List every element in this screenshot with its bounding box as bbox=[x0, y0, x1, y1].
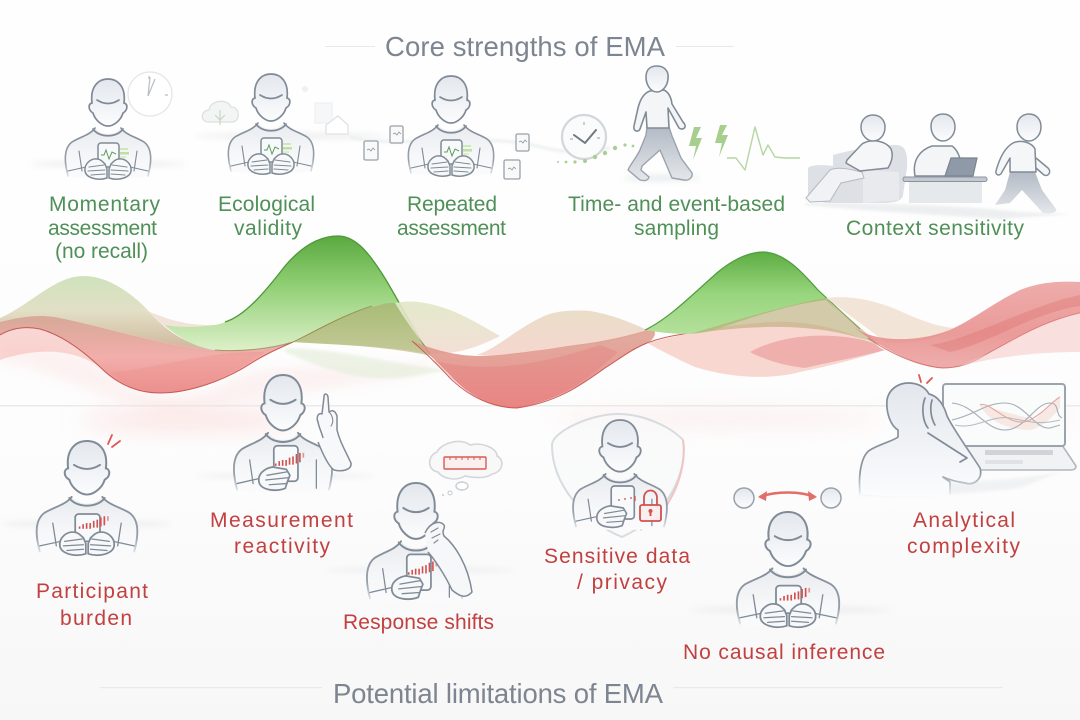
heading: core strengths: Core strengths of EMA bbox=[385, 31, 666, 62]
pale trail on the right bbox=[960, 313, 1080, 366]
heading: potential limitations: Potential limitations of EMA bbox=[333, 678, 664, 709]
olive under the second peak bbox=[690, 298, 880, 345]
pale ridge right of the peak bbox=[395, 302, 500, 354]
big green peak bbox=[165, 236, 430, 354]
label: context sensitivity: Context sensitivity bbox=[846, 217, 1024, 240]
label: measurement reactivity: reactivity bbox=[234, 535, 330, 558]
figure: no causal inference bbox=[690, 488, 890, 627]
label: analytical complexity: Analytical bbox=[913, 509, 1015, 532]
label: ecological validity: validity bbox=[234, 217, 302, 240]
person from behind bbox=[859, 383, 981, 496]
label: ecological validity bbox=[218, 193, 315, 240]
right red ribbon bbox=[850, 282, 1080, 368]
label: momentary assessment bbox=[48, 193, 160, 263]
label: time- and event-based sampling: Time- and event-based bbox=[568, 193, 785, 216]
figure: repeated assessment with cards bbox=[350, 76, 610, 179]
figure: momentary assessment with clock bbox=[30, 72, 186, 179]
figure: time and event sampling, clock, walker, pulse bbox=[557, 66, 800, 181]
label: participant burden bbox=[36, 580, 148, 630]
label: sensitive data / privacy: Sensitive data bbox=[544, 545, 690, 568]
right tan hill bbox=[826, 297, 954, 343]
label: sensitive data / privacy: / privacy bbox=[577, 571, 668, 594]
label: measurement reactivity bbox=[210, 509, 353, 558]
figure: context sensitivity, sitting, working, walking bbox=[805, 114, 1070, 219]
label: analytical complexity: complexity bbox=[907, 535, 1020, 558]
label: no causal inference: No causal inference bbox=[683, 641, 885, 664]
label: repeated assessment bbox=[397, 193, 506, 240]
figure: analytical complexity, person and laptop bbox=[859, 375, 1076, 496]
centre tan hill bbox=[476, 311, 647, 355]
label: momentary assessment: assessment bbox=[48, 217, 157, 240]
figure: ecological validity with tree and houses bbox=[195, 74, 385, 174]
label: repeated assessment: Repeated bbox=[407, 193, 497, 216]
label: time- and event-based sampling: sampling bbox=[634, 217, 719, 240]
centre red drop bbox=[412, 330, 655, 408]
second green peak bbox=[645, 252, 836, 334]
figure: response shifts, thinking with ruler bubble bbox=[325, 441, 515, 602]
armchair bbox=[808, 145, 907, 203]
label: measurement reactivity: Measurement bbox=[210, 509, 353, 532]
desk and worker bbox=[914, 146, 962, 176]
label: ecological validity: Ecological bbox=[218, 193, 315, 216]
label: momentary assessment: Momentary bbox=[49, 193, 160, 216]
figure: participant burden bbox=[2, 435, 172, 555]
walker bbox=[995, 172, 1056, 213]
label: participant burden: burden bbox=[60, 607, 132, 630]
figure: sensitive data, shield and padlock bbox=[552, 414, 684, 537]
soft fade under the ribbons bbox=[0, 343, 430, 412]
label: participant burden: Participant bbox=[36, 580, 148, 603]
label: sensitive data / privacy bbox=[544, 545, 690, 594]
label: time- and event-based sampling bbox=[568, 193, 785, 240]
left red band bbox=[0, 316, 293, 393]
left green hill bbox=[0, 276, 215, 350]
label: repeated assessment: assessment bbox=[397, 217, 506, 240]
chart: intertwined green and red ribbons bbox=[0, 236, 1080, 412]
laptop bbox=[950, 445, 1076, 470]
figure: measurement reactivity bbox=[195, 375, 375, 493]
red haze under the horizon bbox=[80, 410, 1080, 427]
label: analytical complexity bbox=[907, 509, 1020, 558]
label: momentary assessment: (no recall) bbox=[55, 240, 148, 263]
label: response shifts: Response shifts bbox=[343, 611, 494, 634]
olive overlap ridge bbox=[293, 303, 432, 356]
second red swell bbox=[647, 322, 885, 377]
